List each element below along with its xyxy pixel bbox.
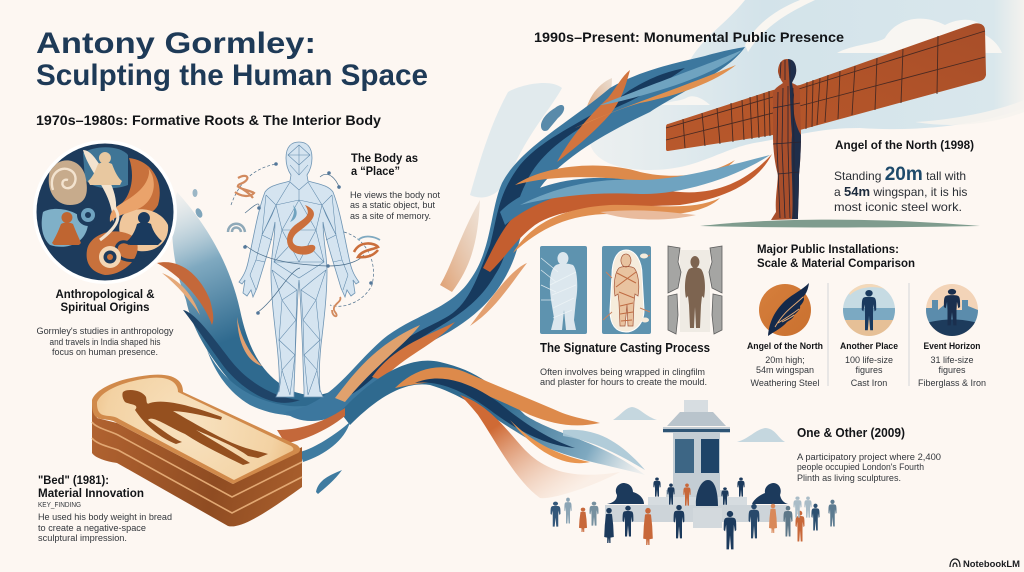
panel: split mould [668, 246, 722, 334]
text: Signature Casting Process: and plaster for hours to create the mould. [540, 377, 707, 387]
illustration: Anthropological and Spiritual Origins medallion [33, 140, 177, 284]
comparison column: Event Horizon: Event Horizon [924, 341, 980, 351]
heading: 1990s–Present: 1990s–Present: Monumental Public Presence [534, 29, 844, 45]
comparison column: Another Place [840, 341, 898, 388]
plinth [605, 400, 787, 528]
text: Major Public Installations [757, 242, 915, 270]
comparison column: Angel of the North: 54m wingspan [756, 365, 814, 375]
illustration: Fourth Plinth with crowd [551, 400, 837, 549]
icon: Event Horizon circle [924, 284, 980, 337]
icon: blue arcs left [228, 224, 245, 232]
heading: 1970s–1980s: 1970s–1980s: Formative Roots & The Interior Body [36, 112, 381, 128]
text: Angel of the North 1998: Standing 20m tall with [834, 164, 966, 185]
comparison column: Another Place: figures [855, 365, 883, 375]
title [36, 27, 428, 92]
text: Signature Casting Process [540, 341, 710, 387]
text: Bed 1981: to create a negative-space [38, 523, 146, 533]
ribbon: main rising stream [285, 47, 772, 421]
ground [700, 220, 980, 228]
icon: Angel of the North circle [759, 283, 811, 336]
illustration: mesh body as a place [228, 142, 380, 397]
text: One and Other 2009: Plinth as living sculptures. [797, 473, 901, 483]
text: Angel of the North 1998: a 54m wingspan, it is his [834, 184, 967, 199]
comparison column: Angel of the North [747, 341, 823, 388]
text: One and Other 2009: One & Other (2009) [797, 426, 905, 440]
comparison column: Event Horizon: Fiberglass & Iron [918, 378, 986, 388]
text: The Body as a Place: a “Place” [351, 164, 400, 178]
text: The Body as a Place: The Body as [351, 151, 418, 165]
bread body impression [122, 390, 268, 465]
text: Signature Casting Process: Often involves being wrapped in clingfilm [540, 367, 705, 377]
text: Anthropological and Spiritual Origins: and travels in India shaped his [50, 337, 161, 347]
text: The Body as a Place: as a site of memory. [350, 211, 431, 221]
text: Bed 1981: "Bed" (1981): [38, 473, 109, 487]
flowing ribbons [157, 47, 772, 498]
text: Anthropological and Spiritual Origins: Gormley's studies in anthropology [36, 326, 174, 336]
icon: Another Place circle [843, 284, 895, 336]
comparison column: Event Horizon: figures [938, 365, 966, 375]
text: Anthropological and Spiritual Origins: Anthropological & [56, 287, 155, 301]
text: Angel of the North 1998: Angel of the North (1998) [835, 140, 974, 152]
text: Major Public Installations: Major Public Installations: [757, 242, 899, 256]
comparison column: Event Horizon: 31 life-size [930, 355, 974, 365]
NotebookLM logo: NotebookLM [963, 559, 1020, 570]
text: Angel of the North 1998: most iconic steel work. [834, 200, 962, 214]
lions [607, 480, 788, 506]
comparison column: Another Place: Another Place [840, 341, 898, 351]
torso and legs [771, 59, 801, 220]
text: The Body as a Place [350, 151, 440, 221]
text: Anthropological and Spiritual Origins: focus on human presence. [52, 347, 158, 357]
orbit lines and dots [231, 164, 373, 312]
text: Bed 1981: KEY_FINDING [38, 502, 81, 509]
text: One and Other 2009: people occupied London's Fourth [797, 462, 924, 472]
title: Sculpting the Human Space [36, 59, 428, 92]
clouds [613, 407, 785, 442]
text: The Body as a Place: He views the body not [350, 190, 440, 200]
icon: navy meditating figure [127, 212, 162, 245]
text: Bed 1981: Material Innovation [38, 486, 144, 500]
sky wash behind Angel of the North [589, 0, 1024, 170]
icon: orange swirl right [354, 243, 378, 257]
comparison column: Angel of the North: Angel of the North [747, 341, 823, 351]
text: One and Other 2009 [797, 426, 941, 483]
icon: orange squiggle left [235, 176, 254, 198]
illustration: Angel of the North sculpture [666, 23, 986, 228]
crowd [551, 477, 837, 549]
comparison column: Angel of the North: Weathering Steel [751, 378, 819, 388]
text: One and Other 2009: A participatory project where 2,400 [797, 452, 941, 462]
panel: clingfilm wrap [540, 246, 587, 334]
title: Antony Gormley: [36, 27, 316, 60]
comparison column: Another Place: 100 life-size [845, 355, 893, 365]
illustrations: Signature Casting Process panels [540, 246, 722, 334]
text: Bed 1981 [38, 473, 172, 543]
panel: plaster bandages [602, 246, 651, 334]
text: Bed 1981: He used his body weight in bread [38, 512, 172, 522]
icon: small flame [332, 297, 340, 316]
comparison column: Another Place: Cast Iron [851, 378, 887, 388]
wings [666, 23, 986, 151]
text: Anthropological and Spiritual Origins [36, 287, 174, 357]
text: Major Public Installations: Scale & Material Comparison [757, 256, 915, 270]
illustration: Bed bread sculpture [92, 375, 302, 526]
text: Bed 1981: sculptural impression. [38, 533, 127, 543]
icon: orange meditating figure [52, 212, 81, 245]
icon: tan meditating figure [88, 152, 122, 185]
comparison column: Angel of the North: 20m high; [765, 355, 805, 365]
text: The Body as a Place: as a static object, but [350, 200, 436, 210]
ribbon: left stream around the body [157, 189, 352, 417]
comparison column: Event Horizon [918, 341, 986, 388]
text: Anthropological and Spiritual Origins: Spiritual Origins [60, 300, 150, 314]
ribbon: lower stream to the plinth [277, 361, 645, 498]
text: Angel of the North 1998 [834, 140, 974, 214]
text: Signature Casting Process: The Signature Casting Process [540, 341, 710, 355]
